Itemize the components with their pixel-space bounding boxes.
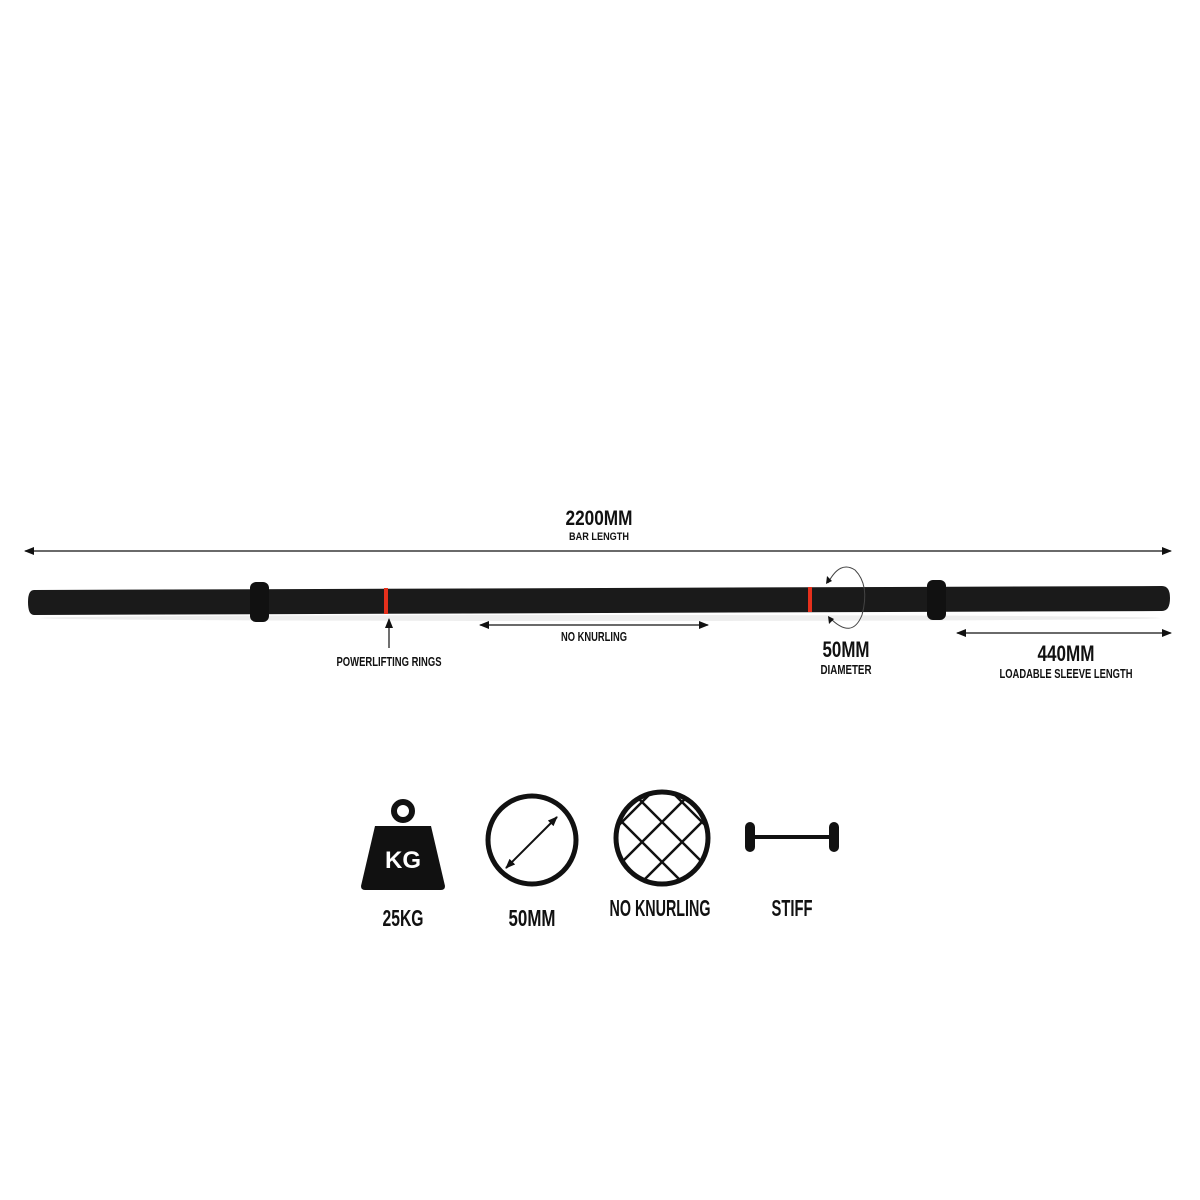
callout: no knurling: NO KNURLING bbox=[561, 629, 627, 644]
icon: weight 25kg: 25KG bbox=[382, 905, 424, 931]
callout: sleeve length: LOADABLE SLEEVE LENGTH bbox=[1000, 666, 1132, 681]
callout: sleeve length: 440MM bbox=[1038, 641, 1094, 666]
callout: powerlifting rings bbox=[336, 619, 442, 669]
bar length label bbox=[566, 507, 632, 543]
callout: powerlifting rings: POWERLIFTING RINGS bbox=[336, 654, 442, 669]
callout: sleeve length bbox=[957, 633, 1171, 681]
bar length label: BAR LENGTH bbox=[569, 531, 629, 543]
barbell bbox=[28, 580, 1170, 622]
icon: weight 25kg: KG bbox=[385, 847, 421, 874]
icon: diameter 50mm: 50MM bbox=[508, 905, 556, 931]
callout: diameter: DIAMETER bbox=[820, 662, 872, 677]
bar length label: 2200MM bbox=[566, 507, 632, 530]
icon: diameter 50mm bbox=[488, 796, 576, 931]
icon: no knurling bbox=[610, 790, 710, 916]
icon: stiff bbox=[745, 822, 839, 921]
callout: diameter bbox=[820, 567, 872, 677]
callout: diameter: 50MM bbox=[822, 637, 870, 662]
icon: no knurling: NO KNURLING bbox=[610, 895, 710, 921]
arrow: bar length bbox=[25, 550, 1171, 552]
icon: weight 25kg bbox=[361, 802, 445, 931]
icon: stiff: STIFF bbox=[772, 895, 812, 921]
